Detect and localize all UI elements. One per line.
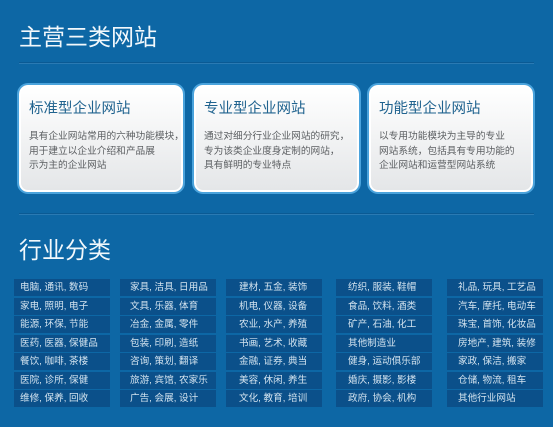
list column 2: 家具, 洁具, 日用品 [130,282,208,293]
list column 1: 家电, 照明, 电子 [20,301,88,312]
list column 4: 食品, 饮料, 酒类 [348,301,416,312]
list column 1: 餐饮, 咖啡, 茶楼 [20,356,88,367]
list column 4: 婚庆, 摄影, 影楼 [348,375,416,386]
list column 5: 房地产, 建筑, 装修 [458,338,536,349]
card text: specialized: 具有鲜明的专业特点 [204,160,291,171]
list column 1: 医院, 诊所, 保健 [20,375,88,386]
list column 2 [120,279,216,407]
list column 4 [336,279,432,407]
list column 2: 文具, 乐器, 体育 [130,301,198,312]
list column 5: 仓储, 物流, 租车 [458,375,526,386]
list column 3: 建材, 五金, 装饰 [239,282,307,293]
list column 2: 广告, 会展, 设计 [130,393,198,404]
list column 1: 维修, 保养, 回收 [20,393,88,404]
list column 5: 珠宝, 首饰, 化妆品 [458,319,536,330]
card text: specialized: 专为该类企业度身定制的网站， [204,146,340,157]
list column 5: 家政, 保洁, 搬家 [458,356,526,367]
list column 5: 礼品, 玩具, 工艺品 [458,282,536,293]
list column 1: 能源, 环保, 节能 [20,319,88,330]
card text: functional: 以专用功能模块为主导的专业 [379,131,505,142]
list column 4: 纺织, 服装, 鞋帽 [348,282,416,293]
list column 4: 健身, 运动俱乐部 [348,356,420,367]
list column 5 [447,279,543,407]
list column 5: 其他行业网站 [458,393,516,404]
card text: standard: 用于建立以企业介绍和产品展 [29,146,155,157]
list column 2: 咨询, 策划, 翻译 [130,356,198,367]
card text: specialized [204,130,349,171]
list column 3: 美容, 休闲, 养生 [239,375,307,386]
list column 4: 政府, 协会, 机构 [348,393,416,404]
card text: specialized: 通过对细分行业企业网站的研究， [204,131,349,142]
panel: functional enterprise website [369,85,533,192]
list column 1: 医药, 医器, 保健品 [20,338,98,349]
list column 2: 包装, 印刷, 造纸 [130,338,198,349]
list column 4: 其他制造业 [348,338,396,349]
title: industry categories: 行业分类 [19,237,111,263]
list column 1 [14,279,110,407]
card text: functional [379,130,515,171]
panel: standard enterprise website [19,85,183,192]
list column 5: 汽车, 摩托, 电动车 [458,301,536,312]
panel: specialized enterprise website [194,85,359,192]
list column 2: 旅游, 宾馆, 农家乐 [130,375,208,386]
card text: standard [29,130,184,171]
list column 3 [226,279,322,407]
list column 3: 书画, 艺术, 收藏 [239,338,307,349]
list column 3: 文化, 教育, 培训 [239,393,307,404]
list column 3: 机电, 仪器, 设备 [239,301,307,312]
card text: standard: 具有企业网站常用的六种功能模块， [29,131,184,142]
card text: functional: 网站系统，包括具有专用功能的 [379,146,515,157]
card heading: functional: 功能型企业网站 [379,101,480,117]
card heading: specialized: 专业型企业网站 [204,101,306,117]
card text: functional: 企业网站和运营型网站系统 [379,160,495,171]
list column 2: 冶金, 金属, 零件 [130,319,198,330]
list column 1: 电脑, 通讯, 数码 [20,282,88,293]
card heading: standard: 标准型企业网站 [29,101,130,117]
card text: standard: 示为主的企业网站 [29,160,106,171]
list column 3: 农业, 水产, 养殖 [239,319,307,330]
list column 3: 金融, 证券, 典当 [239,356,307,367]
title: main services: 主营三类网站 [19,24,157,50]
list column 4: 矿产, 石油, 化工 [348,319,416,330]
